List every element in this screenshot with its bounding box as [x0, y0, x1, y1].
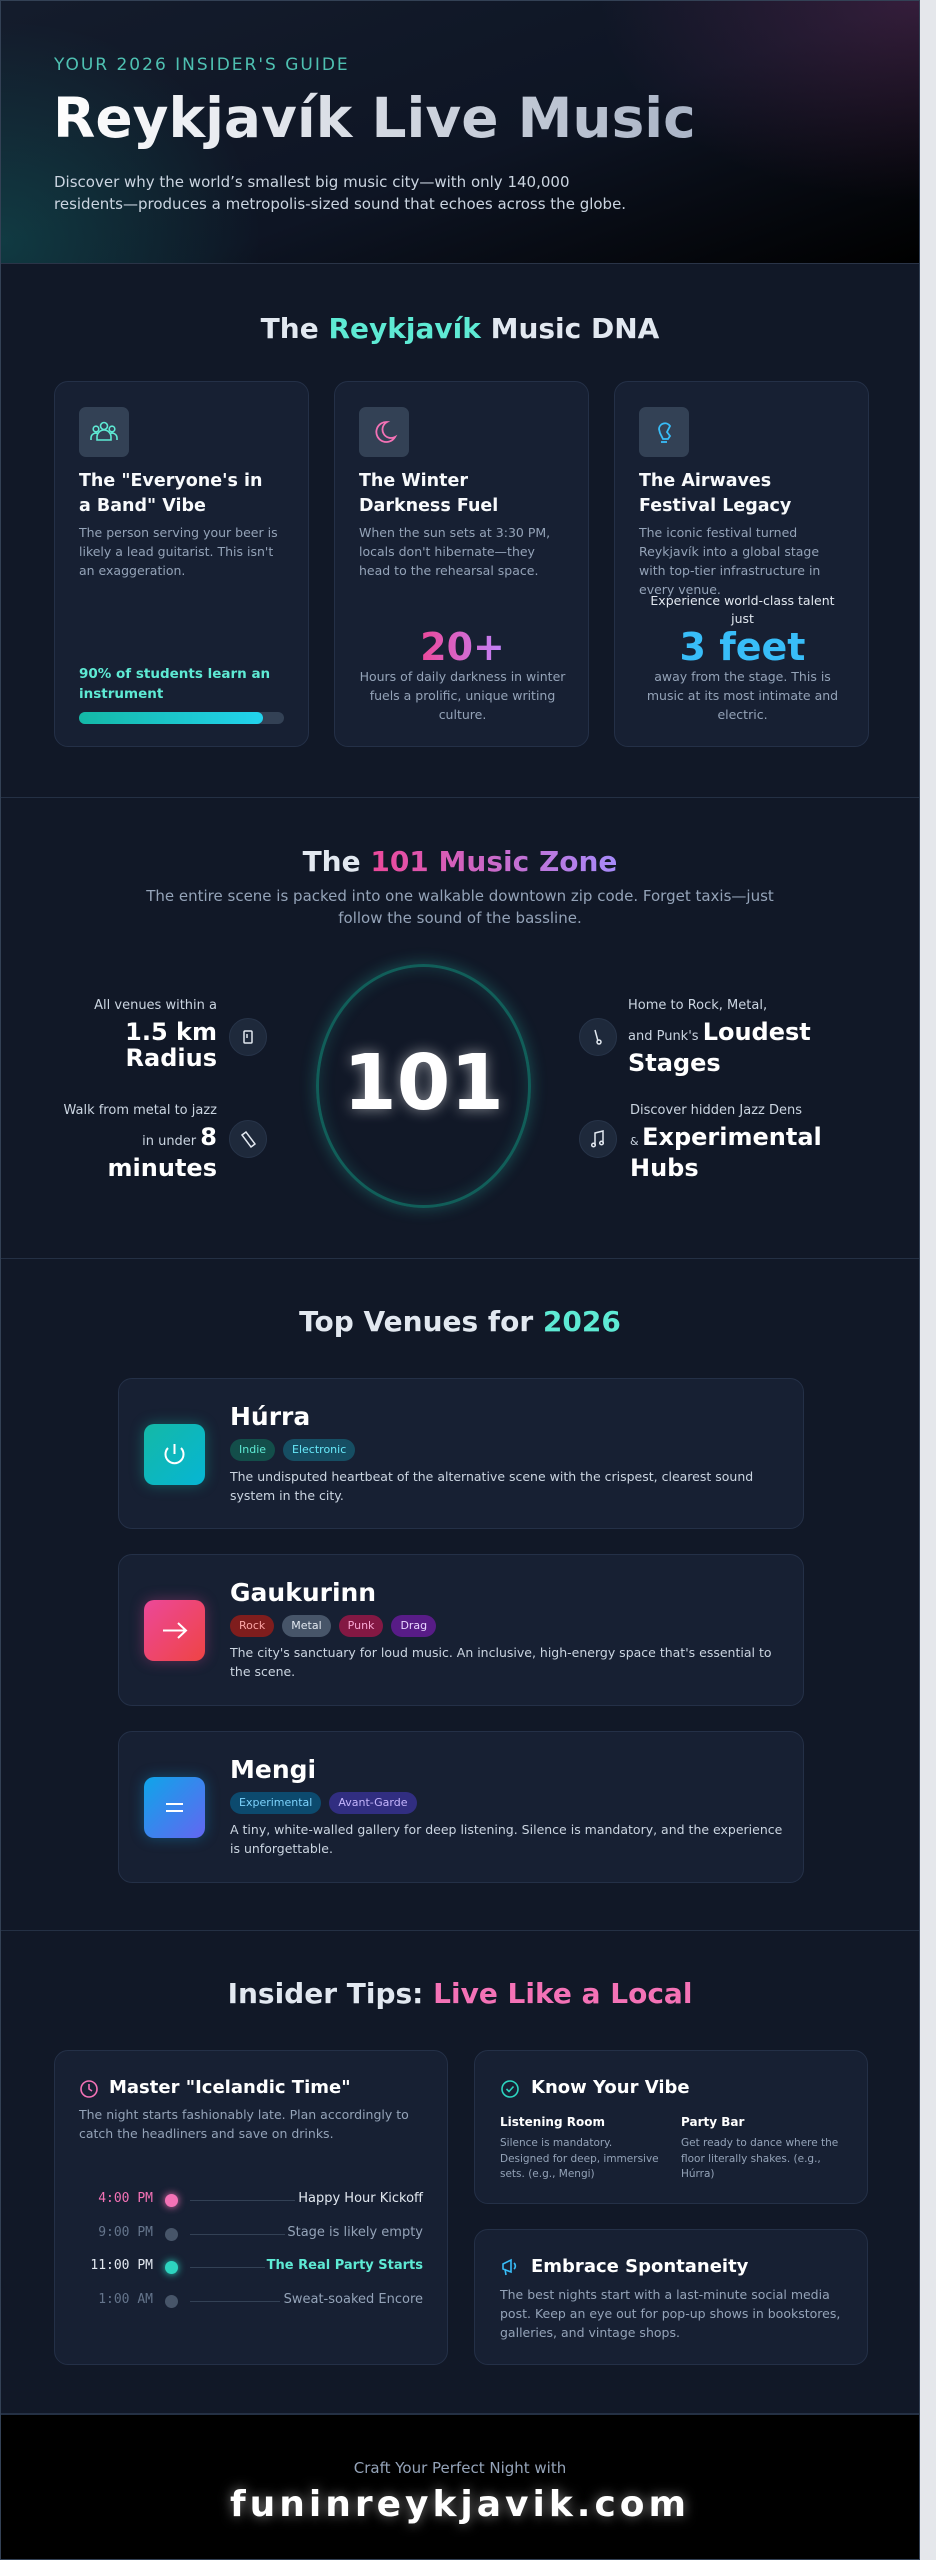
subtitle: The entire scene is packed into one walkable downtown zip code. Forget taxis—just follow the sound of the bassline.: [146, 887, 774, 927]
stat: loudest stages: Stages: [628, 1049, 721, 1077]
timeline: Sweat-soaked Encore: [284, 2292, 423, 2307]
timeline: 11:00 PM: [90, 2258, 153, 2273]
icon: equals: [144, 1777, 205, 1838]
title: The Airwaves Festival Legacy: [639, 471, 791, 516]
stat: 20+: 20+: [420, 625, 505, 669]
description: A tiny, white-walled gallery for deep listening. Silence is mandatory, and the experience is unforgettable.: [230, 1822, 782, 1856]
icon: clock: [80, 2080, 98, 2098]
title: Reykjavík Live Music: [53, 86, 696, 150]
tags: Rock: [239, 1619, 265, 1632]
stat lead: Experience world-class talent just: [650, 593, 835, 626]
icon: guitar: [579, 1018, 617, 1056]
stat: 1.5 km radius: Radius: [126, 1044, 217, 1072]
section: 101 music zone: [1, 798, 919, 1259]
name: Mengi: [230, 1755, 316, 1784]
section: music DNA: [1, 264, 919, 798]
stat: 90% of students learn an instrument: [79, 666, 270, 702]
icon: people: [79, 407, 129, 457]
description: When the sun sets at 3:30 PM, locals don't hibernate—they head to the rehearsal space.: [359, 525, 550, 578]
intro text: residents—produces a metropolis-sized sound that echoes across the globe.: [54, 195, 626, 213]
ring with 101: 101: [343, 1039, 504, 1128]
card: icelandic time: [54, 2050, 448, 2365]
tags: Metal: [291, 1619, 322, 1632]
stat caption: Hours of daily darkness in winter fuels a prolific, unique writing culture.: [360, 669, 565, 722]
timeline: Happy Hour Kickoff: [298, 2191, 423, 2206]
stat: experimental hubs: & Experimental: [630, 1123, 822, 1151]
tags: Electronic: [292, 1443, 346, 1456]
column: listening room: [500, 2115, 659, 2180]
icon: megaphone: [502, 2258, 516, 2276]
description: The person serving your beer is likely a lead guitarist. This isn't an exaggeration.: [79, 525, 278, 578]
description: The night starts fashionably late. Plan accordingly to catch the headliners and save on drinks.: [79, 2107, 409, 2141]
stat: loudest stages: Home to Rock, Metal,: [628, 998, 767, 1013]
card: know your vibe: [474, 2050, 868, 2204]
intro text: Discover why the world’s smallest big music city—with only 140,000: [54, 173, 570, 191]
card: everyone's in a band: [54, 381, 309, 747]
stat: 8 minutes: [63, 1103, 217, 1182]
column: listening room: Listening Room: [500, 2115, 605, 2129]
tags: [230, 1439, 355, 1461]
description: The city's sanctuary for loud music. An inclusive, high-energy space that's essential to the scene.: [230, 1645, 772, 1679]
timeline: [90, 2188, 424, 2308]
title: Master "Icelandic Time": [109, 2077, 351, 2098]
heading: Insider Tips: Live Like a Local: [228, 1977, 692, 2010]
icon: power: [144, 1424, 205, 1485]
card: winter darkness: [334, 381, 589, 747]
column: party bar: [681, 2115, 838, 2180]
name: Gaukurinn: [230, 1578, 376, 1607]
stat: loudest stages: [628, 998, 811, 1077]
stat: 3 feet: 3 feet: [680, 625, 805, 669]
footer: [1, 2413, 919, 2560]
stat: loudest stages: and Punk's Loudest: [628, 1018, 811, 1046]
title: Know Your Vibe: [531, 2077, 690, 2098]
icon: bulb: [639, 407, 689, 457]
footer domain: funinreykjavik.com: [230, 2484, 690, 2525]
icon: music note: [579, 1120, 617, 1158]
tags: [230, 1792, 417, 1814]
tags: Indie: [239, 1443, 266, 1456]
intro text: [54, 173, 626, 213]
footer lead: Craft Your Perfect Night with: [354, 2459, 566, 2477]
heading: The Reykjavík Music DNA: [261, 312, 659, 345]
stat: 8 minutes: Walk from metal to jazz: [63, 1103, 217, 1118]
title: Embrace Spontaneity: [531, 2256, 748, 2277]
stat: 1.5 km radius: All venues within a: [94, 998, 217, 1013]
stat: experimental hubs: Hubs: [630, 1154, 699, 1182]
icon: arrow: [144, 1600, 205, 1661]
title: The Winter Darkness Fuel: [359, 471, 498, 516]
stat: experimental hubs: [630, 1103, 822, 1182]
heading: Top Venues for 2026: [299, 1305, 621, 1338]
timeline: 9:00 PM: [98, 2225, 153, 2240]
section: insider tips: [54, 1977, 868, 2365]
description: The iconic festival turned Reykjavík into a global stage with top-tier infrastructure in every venue.: [639, 525, 820, 597]
tags: Avant-Garde: [338, 1796, 408, 1809]
timeline: 4:00 PM: [98, 2191, 153, 2206]
title: The "Everyone's in a Band" Vibe: [79, 471, 262, 516]
icon: moon: [359, 407, 409, 457]
tags: Punk: [348, 1619, 374, 1632]
stat: 1.5 km radius: 1.5 km: [125, 1018, 217, 1046]
tags: Drag: [400, 1619, 427, 1632]
name: Húrra: [230, 1402, 310, 1431]
stat caption: away from the stage. This is music at its most intimate and electric.: [647, 669, 838, 722]
timeline: 1:00 AM: [98, 2292, 153, 2307]
column: party bar: Party Bar: [681, 2115, 744, 2129]
venue card: Húrra: [118, 1378, 804, 1529]
stat: 8 minutes: minutes: [108, 1154, 217, 1182]
column: listening room: Designed for deep, immersive sets. (e.g., Mengi): [500, 2152, 659, 2180]
header: [1, 1, 919, 264]
stat: experimental hubs: Discover hidden Jazz Dens: [630, 1103, 802, 1118]
tags: [230, 1615, 436, 1637]
progress bar: [79, 712, 284, 724]
icon: phone: [229, 1018, 267, 1056]
stat: 1.5 km radius: [94, 998, 217, 1072]
timeline: Stage is likely empty: [287, 2225, 423, 2240]
column: party bar: Get ready to dance where the floor literally shakes. (e.g., Húrra): [681, 2137, 838, 2180]
subtitle: YOUR 2026 INSIDER'S GUIDE: [54, 55, 350, 75]
section: top venues: [1, 1259, 919, 1931]
timeline: The Real Party Starts: [267, 2258, 423, 2273]
icon: tag: [229, 1120, 267, 1158]
venue card: Gaukurinn: [118, 1554, 804, 1706]
description: The undisputed heartbeat of the alternative scene with the crispest, clearest sound system in the city.: [230, 1469, 753, 1503]
icon: check: [501, 2080, 519, 2098]
stat: 8 minutes: in under 8: [142, 1123, 217, 1151]
card: airwaves: [614, 381, 869, 747]
tags: Experimental: [239, 1796, 312, 1809]
ring with 101: [316, 964, 531, 1208]
heading: The 101 Music Zone: [303, 845, 617, 878]
column: listening room: Silence is mandatory.: [500, 2137, 612, 2149]
card: embrace spontaneity: [474, 2229, 868, 2365]
venue card: Mengi: [118, 1731, 804, 1883]
description: The best nights start with a last-minute social media post. Keep an eye out for pop-up shows in bookstores, galleries, and vintage shops.: [500, 2287, 840, 2340]
